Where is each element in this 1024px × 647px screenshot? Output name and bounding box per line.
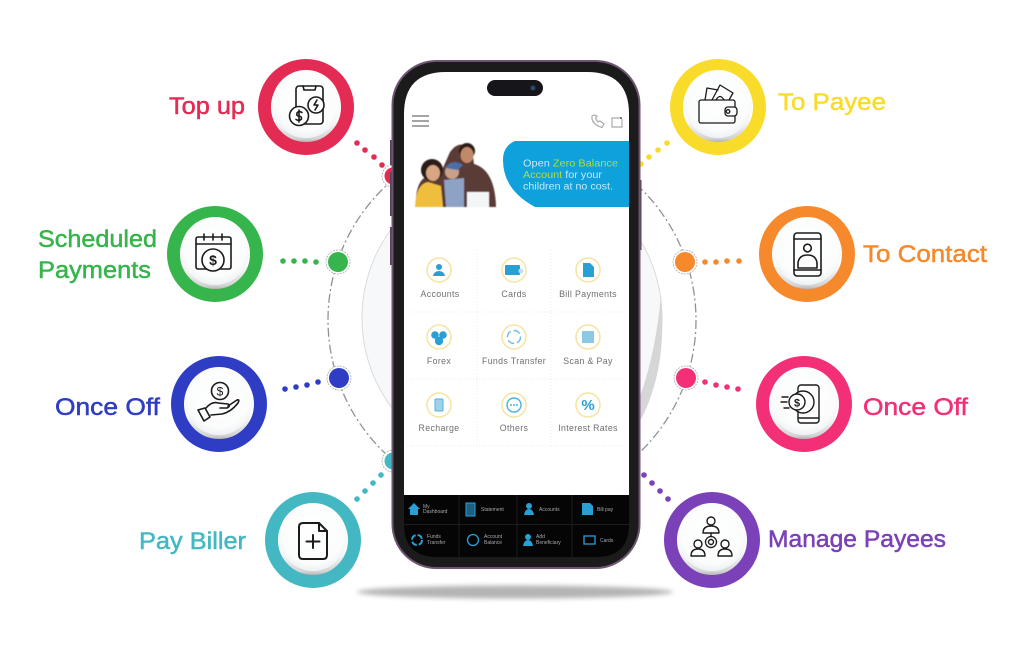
nav: my dashboard: Dashboard (423, 509, 448, 515)
nav: statement (466, 503, 504, 516)
nav: account balance: Balance (484, 540, 502, 546)
phone (390, 61, 642, 568)
icon: document plus (299, 523, 327, 559)
menu: cards: Cards (501, 289, 527, 299)
item: to payee (676, 66, 886, 148)
connector: manage payees (641, 472, 671, 502)
item: to contact: To Contact (863, 241, 987, 268)
promo banner: Account for your (523, 170, 603, 181)
connector: to contact (673, 250, 742, 274)
item: to payee: To Payee (778, 89, 886, 116)
item: scheduled payments: Scheduled (38, 226, 157, 253)
icon: wallet (699, 85, 737, 123)
menu: forex (427, 325, 451, 366)
floor shadow under phone (357, 586, 673, 598)
nav: accounts (524, 503, 560, 515)
menu: interest rates: % (581, 397, 595, 414)
icon: hand with coin (198, 382, 239, 421)
icon: people around gear (691, 517, 732, 556)
menu: bill payments (559, 258, 617, 299)
menu: recharge (419, 393, 459, 433)
bottom navigation bar (404, 495, 629, 557)
icon: phone with fast coin: $ (794, 398, 800, 410)
nav: add beneficiary: Add (536, 534, 545, 540)
menu: scan and pay (563, 325, 613, 366)
nav: add beneficiary (523, 534, 561, 546)
menu: accounts: Accounts (421, 289, 460, 299)
menu grid lines (407, 250, 625, 446)
connector: top up (354, 140, 404, 187)
dynamic island (487, 80, 543, 96)
icon: calendar with dollar (196, 234, 231, 271)
icon: phone with fast coin (781, 385, 819, 423)
item: top up: Top up (169, 93, 245, 120)
nav: bill pay (582, 503, 614, 515)
nav: statement: Statement (481, 507, 504, 513)
nav: account balance: Account (484, 534, 503, 540)
icon: hand with coin: $ (217, 384, 224, 398)
menu: funds transfer (482, 325, 546, 366)
item: manage payees (670, 498, 946, 582)
menu: others: Others (500, 423, 529, 433)
phone screen (404, 72, 629, 495)
family photo (415, 143, 496, 207)
background orbit disc (362, 168, 662, 468)
nav: funds transfer: Funds (427, 534, 441, 540)
item: top up (169, 66, 348, 148)
promo banner (503, 141, 629, 207)
connector: scheduled payments (280, 250, 350, 274)
connector: once off pink (674, 366, 741, 392)
connector: pay biller (354, 450, 404, 502)
nav: funds transfer (412, 534, 446, 546)
promo banner: children at no cost. (523, 182, 613, 192)
icon: phone with coins (290, 86, 324, 126)
item: once off pink (762, 362, 968, 446)
icon: phone contact (794, 233, 821, 276)
nav: account balance (468, 534, 503, 546)
menu: others (500, 393, 529, 433)
item: once off blue (55, 362, 260, 446)
nav: add beneficiary: Beneficiary (536, 540, 561, 546)
nav: cards (584, 536, 614, 544)
menu: scan and pay: Scan & Pay (563, 356, 613, 366)
item: once off blue: Once Off (55, 394, 160, 421)
item: once off pink: Once Off (863, 394, 968, 421)
menu: funds transfer: Funds Transfer (482, 356, 546, 366)
nav: cards: Cards (600, 538, 614, 544)
item: pay biller: Pay Biller (139, 528, 246, 555)
phone side buttons (390, 140, 642, 265)
dashed orbit ring (328, 136, 696, 504)
nav: bill pay: Bill pay (597, 507, 614, 513)
menu: interest rates: Interest Rates (558, 423, 618, 433)
promo banner: Open Zero Balance (523, 158, 619, 170)
menu: interest rates (558, 393, 618, 433)
hamburger menu (412, 115, 429, 127)
item: pay biller (139, 498, 354, 582)
item: to contact (766, 212, 987, 296)
item: scheduled payments: Payments (38, 257, 151, 284)
phone body (392, 61, 640, 568)
connector: to payee (638, 140, 670, 167)
nav: my dashboard (408, 503, 448, 515)
menu: forex: Forex (427, 356, 451, 366)
call and share icons (592, 115, 622, 128)
item: manage payees: Manage Payees (768, 526, 946, 553)
nav: funds transfer: Transfer (427, 540, 446, 546)
menu: bill payments: Bill Payments (559, 289, 617, 299)
menu: cards (501, 258, 527, 299)
menu: recharge: Recharge (419, 423, 459, 433)
nav: accounts: Accounts (539, 507, 560, 513)
icon: calendar with dollar: $ (209, 252, 217, 268)
connector: once off blue (282, 366, 351, 392)
item: scheduled payments (38, 212, 256, 296)
nav: my dashboard: My (423, 504, 430, 510)
menu: accounts (421, 258, 460, 299)
